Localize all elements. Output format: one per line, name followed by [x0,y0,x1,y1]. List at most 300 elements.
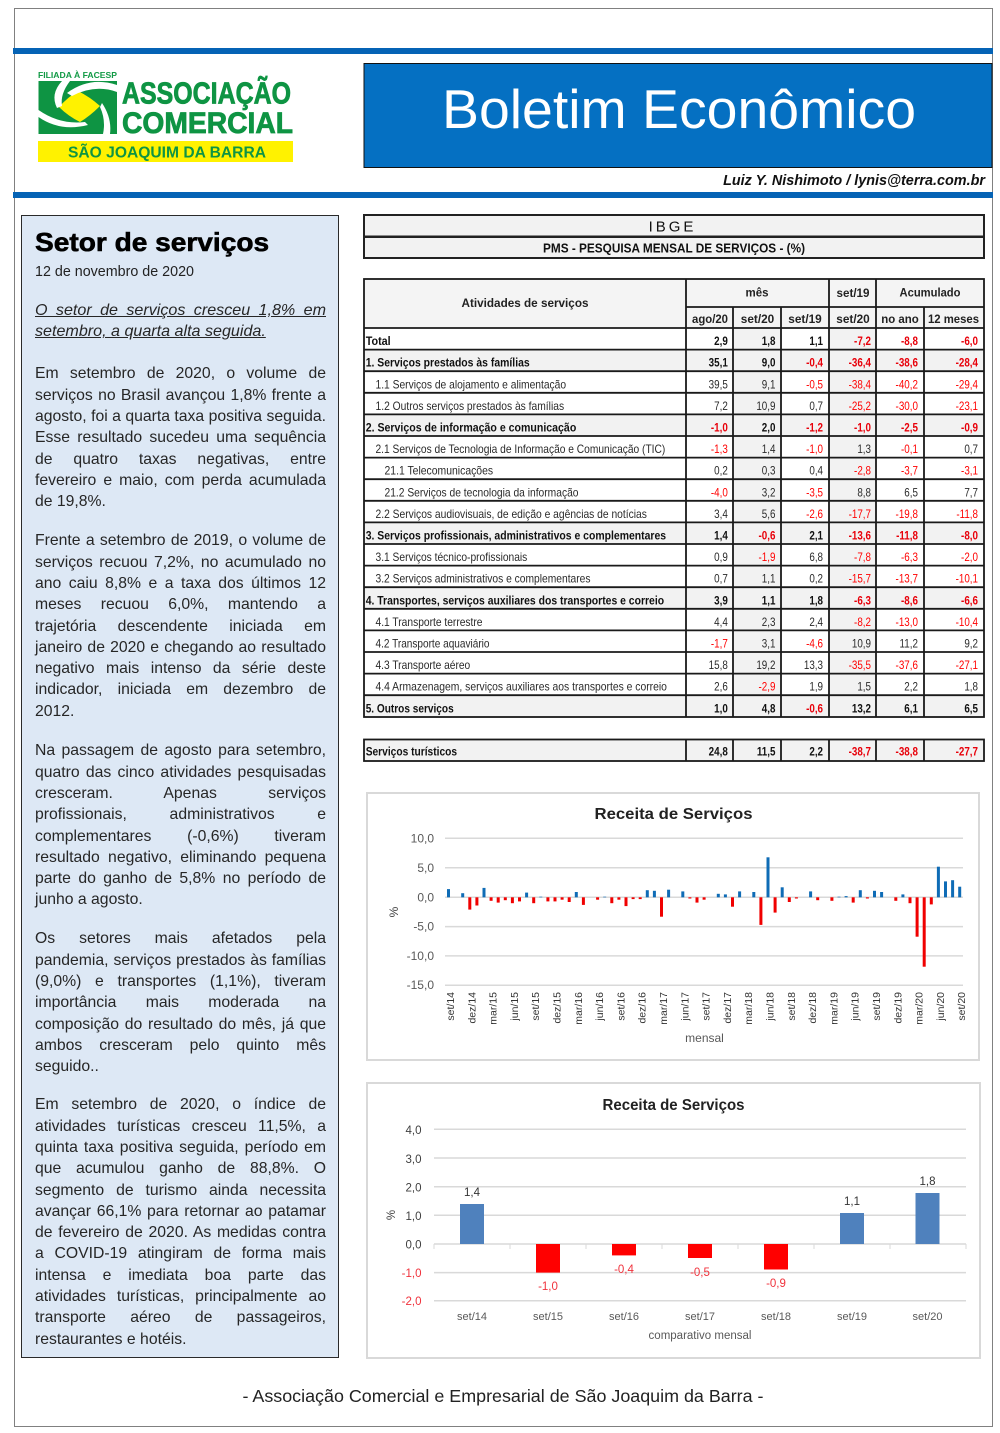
category labels: set/20 [913,1311,942,1323]
row: 4.1: 4.1 Transporte terrestre [376,615,483,629]
month labels: mar/18 [743,992,755,1025]
paragraph 5: que acumulou ganho de 88,8%. O [35,1160,326,1177]
category labels: set/14 [457,1311,487,1323]
row: 2.1: -0,1 [901,443,918,456]
row: 3.1: -2,0 [961,551,978,564]
table row: Serviços turísticos: 11,5 [757,746,775,759]
row: 4.4: 2,2 [904,681,918,694]
y axis labels: -5,0 [413,920,434,934]
row: 2.2: -2,6 [806,508,823,521]
paragraph 5: intensa e imediata boa parte das [35,1267,326,1284]
row: 21.1: -3,7 [901,465,918,478]
paragraph 3: quatro das cinco atividades pesquisadas [35,764,326,781]
row: 4.1: -8,2 [854,616,871,629]
month labels: dez/15 [552,992,564,1024]
paragraph 3: complementares (-0,6%) tiveram [35,828,326,845]
paragraph 3: cresceram. Apenas serviços [35,785,326,802]
paragraph 1 [35,365,326,510]
logo: Associação Comercial: FILIADA À FACESP [38,70,118,80]
row: 2.2: 2.2 Serviços audiovisuais, de edição e agências de notícias [376,507,647,521]
row: 21.2 [384,485,978,500]
category labels: set/19 [837,1311,867,1323]
row: 2.2: -17,7 [849,508,871,521]
table header labels: Atividades de serviços [462,296,589,310]
row: 4: -6,3 [854,594,871,608]
row: 3.1: -6,3 [901,551,918,564]
y axis labels: 4,0 [406,1125,422,1137]
paragraph 4: Os setores mais afetados pela [35,930,326,947]
month labels: jun/18 [764,992,776,1022]
row: 21.2: 3,2 [762,486,775,500]
row: 1.2: -30,0 [896,400,918,413]
row: Total: Total [366,334,391,348]
paragraph 2: janeiro de 2020 e chegando ao resultado [35,639,326,656]
y axis labels: 2,0 [406,1182,422,1194]
row: 2.2: -19,8 [896,508,918,521]
y axis title: % [387,906,401,917]
y axis labels [402,1125,422,1308]
paragraph 4: pandemia, serviços prestados às famílias [35,952,326,969]
y axis labels [407,832,434,992]
y axis labels: 1,0 [406,1211,422,1223]
row: 4.3: 13,3 [804,659,823,672]
paragraph 1: fevereiro e maio, com perda acumulada [35,472,326,489]
table heading: IBGE [364,215,984,236]
row: 3.1: 6,8 [809,551,823,564]
paragraph 1: Em setembro de 2020, o volume de [35,365,326,382]
month labels: mar/17 [658,992,670,1025]
row: 4.1: -10,4 [956,616,978,629]
month labels: jun/19 [850,992,862,1022]
x axis title: comparativo mensal [649,1330,751,1342]
row: 5 [366,701,978,716]
row: Total: 1,8 [762,335,775,348]
row: Total [366,334,978,348]
row: 3: 2,1 [809,530,823,543]
row: 3.1 [376,550,978,564]
y axis labels: 0,0 [406,1240,422,1252]
top blue rule [13,48,993,54]
row: 2.1: -1,3 [711,443,728,456]
paragraph 1: de quatro taxas negativas, entre [35,451,326,468]
row: 4.2: -1,7 [711,638,728,651]
row: 4.2: 11,2 [900,638,918,651]
title banner [364,64,992,168]
panel heading: Setor de serviços [35,227,269,257]
row: 2 [366,420,978,435]
row: 1.1: -40,2 [896,378,918,392]
row: 5: 4,8 [762,702,775,716]
table row: Serviços turísticos: 2,2 [809,746,823,759]
panel: Setor de serviços background [21,215,339,1358]
row: 4.4: 4.4 Armazenagem, serviços auxiliares aos transportes e correio [376,680,667,694]
row: 2.2 [376,507,978,521]
paragraph 3: Na passagem de agosto para setembro, [35,742,326,759]
row: 1.1: -29,4 [956,378,978,392]
month labels: jun/15 [509,992,521,1022]
data table [364,279,984,717]
table heading: PMS: PMS - PESQUISA MENSAL DE SERVIÇOS - (%) [543,242,805,256]
row: 4: -8,6 [901,594,918,608]
row: 4.2: 9,2 [964,638,978,651]
row: 3: 1,4 [714,530,729,543]
row: 4.3: 15,8 [709,659,728,672]
row: 1: 35,1 [709,357,728,370]
paragraph 2: meses recuou 6,0%, mantendo a [35,596,326,613]
row: 21.1: -2,8 [854,465,871,478]
row: 2.2: 3,4 [714,508,728,521]
paragraph 4: ambos cresceram pelo quinto mês [35,1037,326,1054]
table row: Serviços turísticos: -38,8 [896,746,918,759]
paragraph 4: composição do resultado do mês, já que [35,1016,326,1033]
x axis title: mensal [685,1031,724,1045]
panel date: 12 de novembro de 2020 [35,264,194,280]
month labels: dez/19 [892,992,904,1024]
row: 4.4: 1,8 [964,681,978,694]
row: 2.1: 2.1 Serviços de Tecnologia de Informação e Comunicação (TIC) [376,442,665,456]
paragraph 1: Esse resultado sucedeu uma sequência [35,429,326,446]
paragraph 2: Frente a setembro de 2019, o volume de [35,532,326,549]
logo: Associação Comercial: ASSOCIAÇÃO [122,76,291,110]
row: 21.1: 0,4 [809,465,823,478]
category labels: set/15 [533,1311,563,1323]
row: 21.1: 0,2 [714,465,728,478]
row: 3: -8,0 [961,530,978,543]
table heading: PMS [364,237,984,258]
paragraph 5: atividades turísticas, principalmente ao [35,1288,326,1305]
month labels: set/17 [701,992,713,1021]
footer: - Associação Comercial e Empresarial de São Joaquim da Barra - [242,1386,764,1406]
paragraph 5: transporte aéreo de passageiros, [35,1309,326,1326]
row: 3: -0,6 [759,530,775,543]
row: 4.3: -27,1 [956,659,978,672]
row: 2: -1,2 [806,422,823,435]
lead text: setembro, a quarta alta seguida. [35,322,266,340]
chart: Receita de Serviços mensal: Receita de Serviços [594,806,753,823]
paragraph 2: indicador, iniciada em dezembro de [35,681,326,698]
row: 2.2: 5,6 [762,508,775,521]
y axis title: % [386,1210,398,1220]
data labels: 1,8 [920,1176,936,1188]
row: 4.3: -35,5 [849,659,871,672]
y axis labels: 0,0 [417,890,434,904]
data labels: -0,9 [766,1278,786,1290]
y axis labels: -10,0 [407,949,434,963]
data labels: 1,4 [464,1187,481,1199]
paragraph 3: junho a agosto. [35,891,143,908]
monthly bars [447,857,961,967]
paragraph 1: agosto, foi a quarta taxa positiva seguida. [35,408,326,425]
row: 4.1: 2,3 [762,616,775,629]
row: 3.2 [376,572,978,586]
row: 21.2: 7,7 [964,486,978,500]
row: 1.2: -25,2 [849,400,871,413]
table header labels: set/19 [836,286,870,300]
data labels: -1,0 [538,1281,558,1293]
table header labels: 12 meses [928,312,979,326]
row: 4: 1,1 [762,594,775,608]
row: Total: -8,8 [901,335,918,348]
row: 4.3 [376,658,978,672]
lead text [35,301,326,340]
paragraph 4: seguido.. [35,1058,99,1075]
row: 1.2: -23,1 [956,400,978,413]
paragraph 5: atividades turísticas cresceu 11,5%, a [35,1118,326,1135]
paragraph 1: de 19,8%. [35,493,106,510]
table header labels: Acumulado [900,286,960,300]
paragraph 2: negativo mais intenso da série deste [35,660,326,677]
row: 2.1: 0,7 [964,443,978,456]
row: 1: 1. Serviços prestados às famílias [366,356,530,370]
row: 3.2: -10,1 [956,573,978,586]
row: 3: -13,6 [849,530,871,543]
paragraph 2: ano caiu 8,8% e a taxa dos últimos 12 [35,575,326,592]
row: 4.4: 2,6 [714,681,728,694]
y axis labels: 5,0 [417,861,434,875]
data labels: 1,1 [844,1196,860,1208]
lead text: O setor de serviços cresceu 1,8% em [35,301,326,319]
row: 1: -38,6 [896,357,918,370]
month labels: mar/19 [828,992,840,1025]
row: 2: 2,0 [762,422,775,435]
row: Total: -6,0 [961,335,978,348]
month labels: mar/20 [914,992,926,1025]
row: 4.4 [376,680,978,694]
logo: Associação Comercial: SÃO JOAQUIM DA BARRA [68,144,266,162]
row: 21.2: 6,5 [904,486,918,500]
row: 3.2: 0,7 [714,573,728,586]
paragraph 5 [35,1096,326,1348]
month labels: jun/20 [935,992,947,1022]
row: 1: 9,0 [762,357,775,370]
chart: Receita de Serviços comparativo [367,1083,980,1358]
row: 4.1: 4,4 [714,616,728,629]
row: 2.1: 1,3 [857,443,871,456]
paragraph 2: 2012. [35,703,74,720]
row: 2.1 [376,442,978,456]
paragraph 5: restaurantes e hotéis. [35,1331,186,1348]
paragraph 3: profissionais, administrativos e [35,806,326,823]
month labels: jun/17 [679,992,691,1022]
row: 3.1: -7,8 [854,551,871,564]
month labels: dez/18 [807,992,819,1024]
row: 1.1: 9,1 [762,378,775,392]
month labels: mar/16 [573,992,585,1025]
row: 4.2: -4,6 [806,638,823,651]
row: Total: -7,2 [854,335,871,348]
row: 5: 6,1 [904,702,918,716]
row: 3.2: 1,1 [762,573,775,586]
lower blue rule [13,192,993,198]
paragraph 3 [34,742,326,908]
month labels: set/15 [530,992,542,1021]
table row: Serviços turísticos: -38,7 [849,746,871,759]
paragraph 5: a COVID-19 atingiram de forma mais [35,1245,326,1262]
row: 1.2: 7,2 [714,400,728,413]
row: 1: -28,4 [956,357,979,370]
y axis labels: -1,0 [402,1268,422,1280]
row: 4.3: -37,6 [896,659,918,672]
table row: Serviços turísticos: 24,8 [709,746,728,759]
logo: Associação Comercial [38,70,293,162]
row: 3.2: 3.2 Serviços administrativos e complementares [376,572,590,586]
row: 4.4: 1,5 [857,681,871,694]
table row: Serviços turísticos: -27,7 [956,746,978,759]
row: 1.2: 1.2 Outros serviços prestados às famílias [376,399,564,413]
row: 4.1: 2,4 [809,616,823,629]
row: 1: -36,4 [849,357,872,370]
row: 1.2 [376,399,978,413]
row: 3.1: 3.1 Serviços técnico-profissionais [376,550,527,564]
paragraph 4 [35,930,326,1075]
row: 4: 1,8 [809,594,823,608]
y axis labels: 3,0 [406,1154,422,1166]
table header labels [462,286,979,326]
row: 4: 4. Transportes, serviços auxiliares dos transportes e correio [366,593,664,607]
row: 4.1: -13,0 [896,616,918,629]
row: 3 [366,528,978,543]
row: 4.2: 3,1 [762,638,775,651]
paragraph 5: segmento de turismo ainda necessita [35,1182,326,1199]
table header labels: set/19 [788,312,822,326]
row: 3: 3. Serviços profissionais, administrativos e complementares [366,528,666,542]
row: 1.1: 39,5 [709,378,728,392]
row: 2: -0,9 [961,422,978,435]
y axis labels: -15,0 [407,978,434,992]
row: 21.2: -4,0 [711,486,728,500]
month labels: set/18 [786,992,798,1021]
row: 2.1: -1,0 [806,443,823,456]
row: 2: -2,5 [901,422,918,435]
y axis labels: 10,0 [411,832,434,846]
row: 4.3: 19,2 [756,659,775,672]
logo: Associação Comercial: COMERCIAL [122,107,293,140]
paragraph 3: resultado negativo, eliminando pequena [35,849,326,866]
row: 2: 2. Serviços de informação e comunicação [366,420,576,434]
row: 1: -0,4 [806,357,824,370]
author line: Luiz Y. Nishimoto / lynis@terra.com.br [723,173,986,189]
row: 4: 3,9 [714,594,728,608]
table header labels: mês [746,286,769,300]
row: 3.2: -13,7 [896,573,918,586]
chart: Receita de Serviços mensal [367,793,979,1060]
row: Total: 2,9 [714,335,728,348]
row: 3.2: -15,7 [849,573,871,586]
table row: Serviços turísticos [364,740,984,761]
row: 2: -1,0 [854,422,871,435]
row: 1.1 [376,377,978,392]
row: 2.2: -11,8 [956,508,978,521]
row: 3.1: 0,9 [714,551,728,564]
month labels: set/16 [615,992,627,1021]
chart: Receita de Serviços comparativo: Receita de Serviços [602,1097,745,1114]
row: 21.1 [384,464,978,478]
paragraph 2: serviços recuou 7,2%, no acumulado no [35,554,326,571]
paragraph 5: quinta taxa positiva seguida, período em [35,1139,326,1156]
row: 1.1: 1.1 Serviços de alojamento e alimentação [376,377,566,391]
row: 4.3: 4.3 Transporte aéreo [376,658,470,672]
table row: Serviços turísticos: Serviços turísticos [366,744,457,758]
row: 1.1: -38,4 [849,378,871,392]
row: 4.2 [376,636,978,651]
row: 4.2: 4.2 Transporte aquaviário [376,636,490,650]
row: 4.1 [376,615,978,629]
comparison bars [460,1193,940,1273]
paragraph 5: de fevereiro de 2020. As medidas contra [35,1224,326,1241]
y axis labels: -2,0 [402,1296,422,1308]
category labels: set/17 [685,1311,715,1323]
table header labels: set/20 [836,312,870,326]
row: 5: 6,5 [964,702,978,716]
month labels: set/20 [956,992,968,1021]
month labels: dez/17 [722,992,734,1024]
row: 5: 1,0 [714,702,728,716]
paragraph 5: avançar 66,1% para retornar ao patamar [35,1203,326,1220]
row: 21.1: 0,3 [762,465,775,478]
paragraph 5: Em setembro de 2020, o índice de [35,1096,326,1113]
row: 3.1: -1,9 [759,551,775,564]
category labels [457,1311,942,1323]
data labels [464,1176,936,1293]
row: 21.1: 21.1 Telecomunicações [384,464,493,478]
data labels: -0,4 [614,1264,635,1276]
category labels: set/16 [609,1311,639,1323]
row: Total: 1,1 [809,335,823,348]
row: 4.4: 1,9 [809,681,823,694]
month labels: jun/16 [594,992,606,1022]
paragraph 4: (9,0%) e transportes (1,1%), tiveram [35,973,326,990]
paragraph 4: importância mais moderada na [35,994,326,1011]
row: 21.1: -3,1 [961,465,978,478]
row: 5: 13,2 [852,702,871,716]
row: 5: 5. Outros serviços [366,701,454,715]
row: 2: -1,0 [711,422,728,435]
paragraph 3: parte do ganho de 5,8% no período de [35,870,326,887]
category labels: set/18 [761,1311,791,1323]
data labels: -0,5 [690,1267,710,1279]
row: 1.1: -0,5 [806,378,823,392]
table header labels: set/20 [741,312,775,326]
row: 2.1: 1,4 [762,443,775,456]
table heading: IBGE: IBGE [649,218,696,236]
month labels [445,992,968,1025]
paragraph 1: serviços no Brasil avançou 1,8% frente a [35,387,326,404]
row: 4 [366,593,978,608]
month labels: dez/14 [466,992,478,1024]
row: 5: -0,6 [806,702,823,716]
row: 21.2: 8,8 [857,486,871,500]
row: 3.2: 0,2 [809,573,823,586]
month labels: dez/16 [637,992,649,1024]
row: 1.2: 0,7 [809,400,823,413]
row: 4.2: 10,9 [852,638,871,651]
month labels: set/14 [445,992,457,1021]
row: 21.2: 21.2 Serviços de tecnologia da informação [384,485,579,499]
row: 1 [366,356,979,370]
title banner: Boletim Econômico [442,78,916,140]
row: 4.4: -2,9 [759,681,775,694]
month labels: mar/15 [488,992,500,1025]
paragraph 2 [34,532,326,720]
row: 4: -6,6 [961,594,978,608]
table header labels: ago/20 [692,312,728,326]
row: 3: -11,8 [896,530,918,543]
row: 1.2: 10,9 [756,400,775,413]
table header labels: no ano [881,312,919,326]
month labels: set/19 [871,992,883,1021]
paragraph 2: trajetória descendente iniciada em [35,618,326,635]
row: 21.2: -3,5 [806,486,823,500]
